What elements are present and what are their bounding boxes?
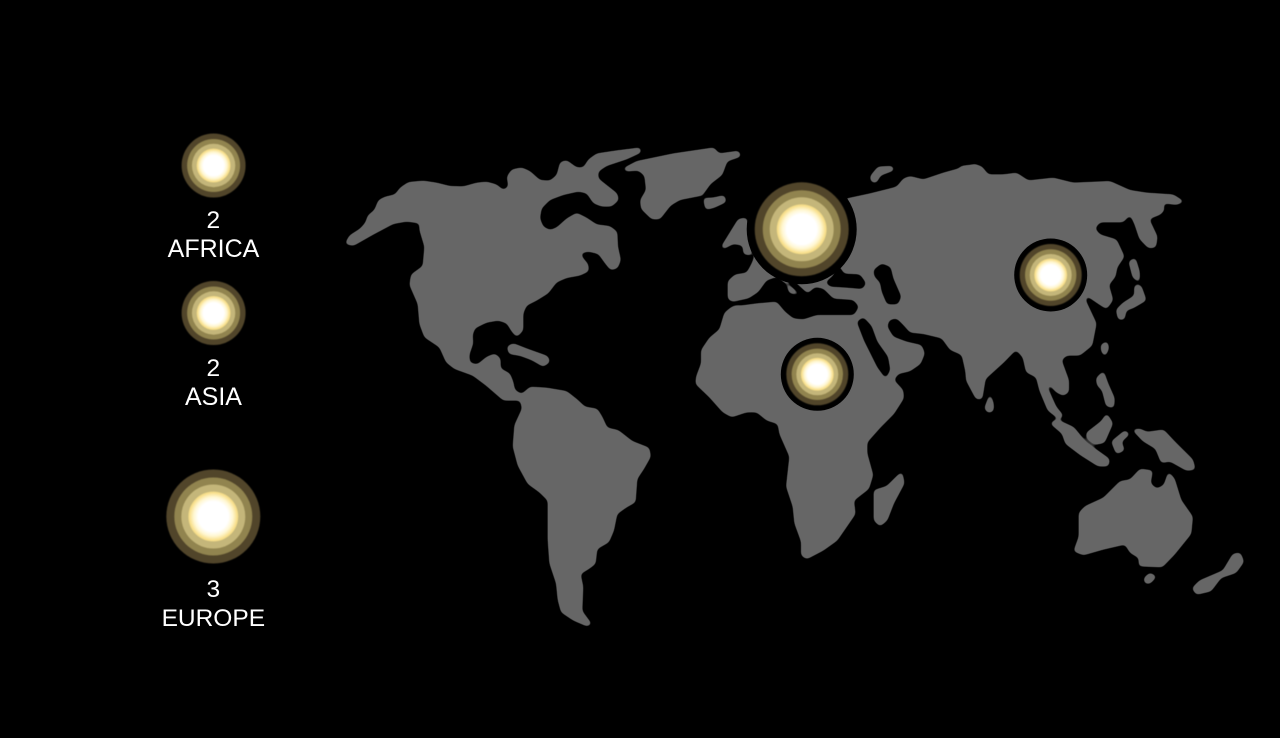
map bubble: africa [781, 338, 854, 411]
label: africa: AFRICA [168, 235, 260, 263]
icon: europe bubble [166, 470, 260, 564]
label: africa: 2 [206, 207, 220, 234]
map bubble: asia [1014, 238, 1087, 312]
eurasia west and africa [695, 163, 977, 559]
label: asia: 2 [206, 355, 220, 382]
sri lanka [985, 395, 993, 412]
italy gap [789, 281, 807, 297]
hokkaido [1129, 259, 1139, 281]
label: asia: ASIA [185, 383, 242, 411]
madagascar [874, 472, 905, 527]
icon: africa bubble [182, 134, 246, 198]
legend item: europe [162, 470, 265, 632]
europe, africa and western asia [695, 163, 977, 559]
americas landmasses [345, 147, 741, 627]
sulawesi [1112, 431, 1129, 453]
philippines [1097, 372, 1114, 407]
eurasia east [960, 164, 1185, 420]
east asia and oceania [960, 164, 1243, 594]
borneo [1087, 414, 1112, 444]
greenland [623, 147, 741, 219]
legend item: africa [168, 134, 260, 263]
north and south america [345, 147, 651, 627]
red sea [857, 317, 890, 379]
great britain [721, 218, 753, 255]
taiwan [1101, 342, 1108, 356]
honshu [1117, 285, 1146, 319]
iceland [704, 196, 726, 209]
new zealand [1193, 553, 1243, 594]
cuba [508, 344, 549, 366]
map bubble: europe [747, 174, 857, 284]
label: europe: 3 [206, 576, 220, 603]
legend item: asia [182, 281, 246, 411]
new guinea [1133, 429, 1195, 470]
australia [1073, 469, 1193, 567]
icon: asia bubble [182, 281, 246, 345]
novaya zemlya [871, 167, 893, 182]
gibraltar strait [731, 299, 758, 304]
mediterranean sea [733, 277, 859, 319]
black sea [825, 264, 866, 289]
caspian sea [873, 263, 901, 304]
sumatra and java [1051, 420, 1109, 466]
tasmania [1144, 573, 1156, 583]
label: europe: EUROPE [162, 605, 265, 632]
